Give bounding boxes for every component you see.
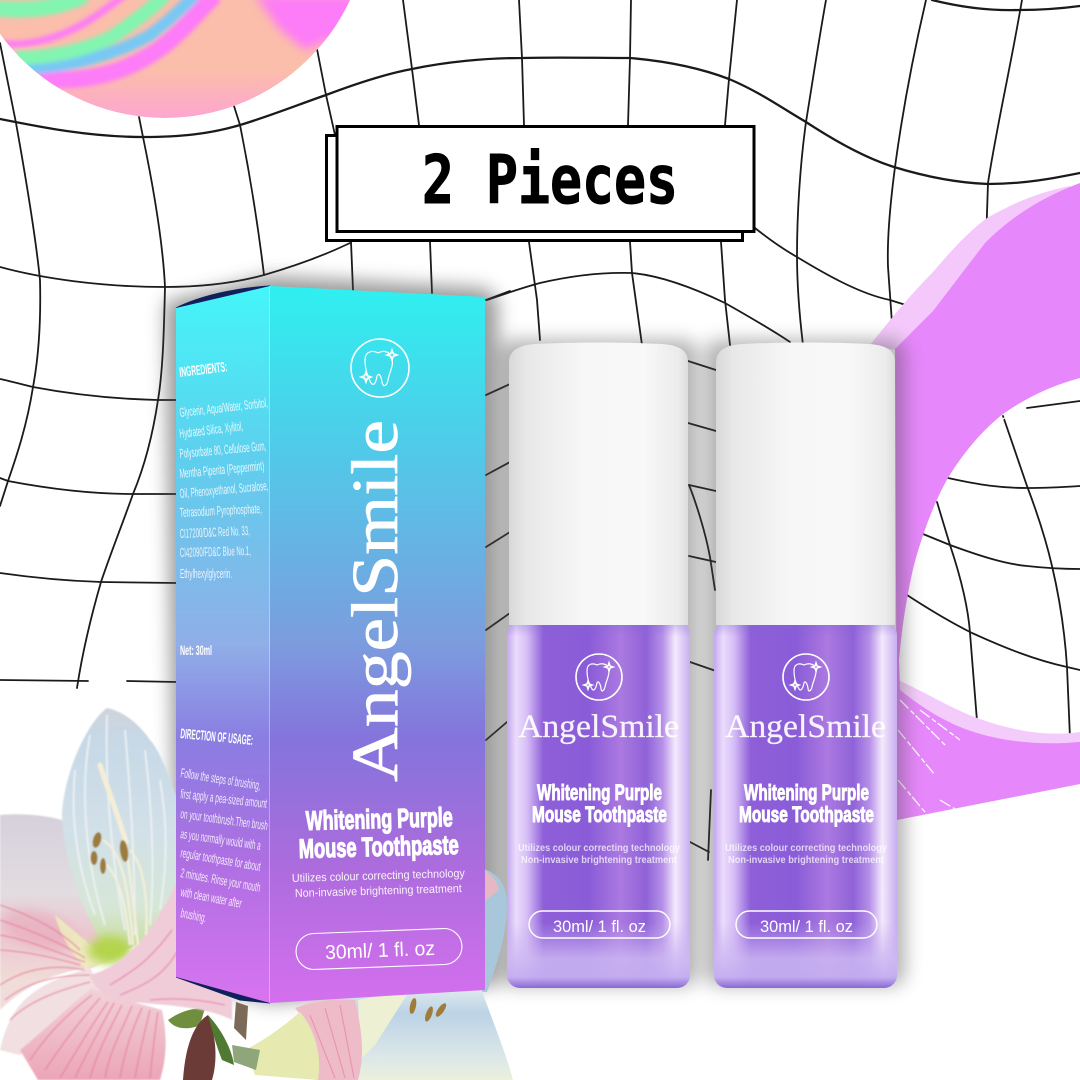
box side panel: DIRECTION OF USAGE: [180, 725, 254, 748]
direction of usage text: first apply a pea-sized amount [180, 786, 268, 811]
bottle 1 [507, 342, 690, 988]
bottle 2 benefits: Utilizes colour correcting technology [725, 843, 887, 854]
brand name vertical: AngelSmile [339, 420, 412, 782]
flower: stem and bud [168, 1002, 248, 1080]
lily flowers [0, 708, 513, 1080]
bottle 2 [714, 342, 897, 988]
bottle 2 white cap [716, 342, 895, 625]
bottle 2 benefits [725, 843, 887, 866]
bottle 1 product title: Mouse Toothpaste [532, 802, 667, 827]
bottle 2 product title [739, 780, 874, 827]
package box [176, 286, 485, 1003]
bottle 2 benefits: Non-invasive brightening treatment [728, 855, 885, 866]
direction of usage text: with clean water after [179, 884, 243, 911]
bottle 1 benefits: Non-invasive brightening treatment [521, 855, 678, 866]
direction of usage text: regular toothpaste for about [179, 845, 262, 874]
box top and bottom edges [176, 286, 270, 1003]
dry brush outer edge [870, 186, 1080, 350]
direction of usage text: as you normally would with a [180, 826, 262, 853]
net volume: Net: 30ml [180, 642, 212, 658]
product benefits: Non-invasive brightening treatment [295, 883, 463, 900]
product title: Mouse Toothpaste [298, 830, 459, 864]
holographic gradient circle [0, 0, 369, 118]
bottle 1 tooth logo [576, 654, 622, 700]
bottle 2 brand name: AngelSmile [725, 709, 886, 745]
direction of usage text: 2 minutes. Rinse your mouth [179, 865, 262, 895]
bottle 2 volume pill: 30ml/ 1 fl. oz [760, 917, 853, 936]
bottle 1 white cap [509, 342, 688, 625]
bottle 2 tooth logo [783, 654, 829, 700]
warped black grid lines [0, 0, 1080, 860]
package box: Oil, Phenoxyethanol, Sucralose, [179, 478, 269, 501]
bottle 2 product title: Whitening Purple [744, 780, 869, 805]
ingredients list [179, 395, 269, 581]
product benefits [292, 868, 465, 900]
bottle 1 product title [532, 780, 667, 827]
ingredients list: Tetrasodium Pyrophosphate, [179, 501, 262, 520]
bottle 2 liquid body [714, 622, 897, 988]
direction of usage text: on your toothbrush.Then brush [180, 806, 269, 833]
direction of usage text [179, 765, 269, 925]
ingredients list: Hydrated Silica, Xylitol, [179, 418, 244, 441]
package box: Polysorbate 80, Cellulose Gum, [179, 438, 267, 461]
box side panel [176, 286, 270, 1003]
flower: right bloom [232, 868, 513, 1080]
purple paint brush swoosh [870, 183, 1080, 820]
title label: 2 Pieces: 2 Pieces [422, 141, 678, 219]
product title [298, 802, 459, 864]
bottle 1 liquid body [507, 622, 690, 988]
bottle 1 volume pill: 30ml/ 1 fl. oz [553, 917, 646, 936]
dry brush lower edge [898, 680, 1080, 745]
ingredients list: CI42090/FD&C Blue No.1, [180, 543, 251, 560]
solid paint stroke [895, 183, 1080, 820]
ingredients list: Glycerin, Aqua/Water, Sorbitol, [179, 395, 269, 420]
bottle 1 product title: Whitening Purple [537, 780, 662, 805]
bottle 1 benefits: Utilizes colour correcting technology [518, 843, 680, 854]
icon: tooth logo [351, 339, 409, 397]
volume pill: 30ml/ 1 fl. oz [325, 938, 435, 964]
box front panel [270, 286, 485, 1003]
bottle 1 benefits [518, 843, 680, 866]
bottle 1 volume pill [529, 911, 670, 938]
ingredients list: CI17200/D&C Red No. 33, [179, 523, 250, 541]
product title: Whitening Purple [305, 802, 453, 836]
box side panel: INGREDIENTS: [178, 358, 228, 380]
product drop shadows [165, 276, 905, 1003]
direction of usage text: brushing. [179, 905, 208, 925]
direction of usage text: Follow the steps of brushing, [180, 765, 262, 793]
volume pill [295, 928, 463, 970]
bottle 2 product title: Mouse Toothpaste [739, 802, 874, 827]
bottle 1 brand name: AngelSmile [518, 709, 679, 745]
flower: main lily petals [0, 708, 232, 1080]
title label: 2 Pieces [326, 126, 754, 240]
product benefits: Utilizes colour correcting technology [292, 868, 465, 885]
bottle 2 volume pill [736, 911, 877, 938]
ingredients list: Ethylhexylglycerin. [180, 566, 232, 581]
ingredients list: Mentha Piperita (Peppermint) [179, 458, 265, 481]
